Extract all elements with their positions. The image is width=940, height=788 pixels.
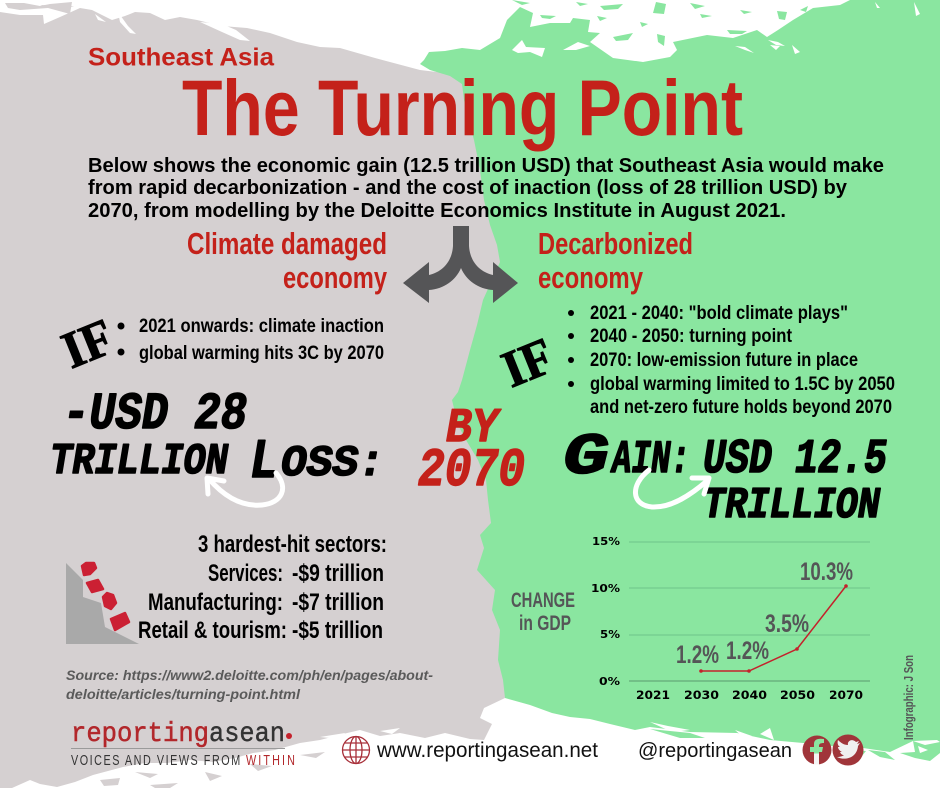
source note — [66, 668, 434, 702]
chart x axis labels — [636, 688, 863, 702]
chart label — [511, 588, 575, 635]
bullets: decarbonized scenario: and net-zero future holds beyond 2070 — [590, 396, 892, 418]
chart data labels — [676, 558, 853, 669]
logo: reportingasean: VOICES AND VIEWS FROM — [71, 751, 240, 768]
chart data labels: 3.5% — [765, 610, 809, 638]
chart data labels: 1.2% — [726, 637, 769, 665]
text block: hardest-hit sectors: Retail & tourism: — [138, 617, 287, 644]
handwritten: gain figure: USD 12.5 — [703, 433, 887, 487]
chart x axis labels: 2021 — [636, 688, 670, 702]
text block: hardest-hit sectors: 3 hardest-hit sectors: — [198, 531, 387, 558]
handwritten: gain figure — [563, 426, 887, 531]
intro text block: 2070, from modelling by the Deloitte Economics Institute in August 2021. — [88, 199, 786, 222]
bullets: decarbonized scenario: 2021 - 2040: "bold climate plays" — [590, 302, 848, 324]
intro text block — [88, 154, 884, 222]
chart y axis labels: 5% — [600, 628, 620, 641]
handwritten: By 2070: 2070 — [418, 441, 525, 502]
chart: change in GDP — [511, 535, 870, 702]
chart x axis labels: 2070 — [829, 688, 863, 702]
background: bottom edge wisps — [650, 722, 774, 740]
arrow: white curved, loss — [207, 473, 283, 505]
logo: reportingasean: WITHIN — [246, 751, 295, 768]
website: www.reportingasean.net — [376, 739, 598, 762]
chart x axis labels: 2030 — [684, 688, 719, 702]
bullets: decarbonized scenario: 2040 - 2050: turning point — [590, 325, 792, 347]
icon: falling rocks — [66, 563, 139, 644]
chart y axis labels — [591, 535, 620, 688]
background: bottom left mottling — [100, 752, 325, 788]
text block: hardest-hit sectors: -$7 trillion — [292, 589, 384, 616]
handwritten: IF left: IF — [54, 309, 122, 380]
intro text block: Below shows the economic gain (12.5 trillion USD) that Southeast Asia would make — [88, 154, 884, 177]
chart x axis labels: 2040 — [732, 688, 767, 702]
bullets: inaction scenario — [118, 315, 384, 364]
icon: facebook — [802, 736, 832, 764]
title: The Turning Point: The Turning Point — [182, 63, 743, 152]
handwritten: loss figure: -USD 28 — [63, 385, 247, 444]
chart y axis labels: 10% — [591, 582, 620, 595]
chart data labels: 1.2% — [676, 641, 719, 669]
chart label: in GDP — [519, 611, 571, 635]
logo: reportingasean — [71, 719, 295, 768]
text block: hardest-hit sectors: -$9 trillion — [292, 560, 384, 587]
subtitle: Southeast Asia: Southeast Asia — [88, 44, 275, 72]
handwritten: By 2070 — [418, 402, 525, 502]
chart y axis labels: 0% — [599, 675, 620, 688]
handwritten: By 2070: BY — [446, 402, 502, 456]
credit: Infographic J Son: Infographic: J Son — [902, 655, 916, 740]
handwritten: loss figure: TRILLION — [50, 437, 229, 487]
bullets: decarbonized scenario — [568, 302, 895, 418]
background: grey flecks on the top left — [5, 2, 74, 14]
chart gridlines — [629, 542, 870, 681]
background: grey torn panel — [0, 8, 505, 788]
handwritten: loss figure: L — [250, 430, 278, 494]
logo: reportingasean: reporting — [71, 719, 209, 750]
twitter handle: @reportingasean — [638, 740, 792, 762]
icon: globe — [342, 736, 370, 764]
handwritten: IF right: IF — [494, 328, 562, 399]
chart y axis labels: 15% — [592, 535, 620, 548]
text block: hardest-hit sectors: Services: — [208, 560, 283, 587]
heading: Decarbonized economy — [538, 226, 693, 295]
chart line series — [699, 584, 848, 673]
heading: Decarbonized economy: economy — [538, 260, 644, 295]
background: bottom right green mottling — [650, 729, 940, 761]
bullets: inaction scenario: 2021 onwards: climate inaction — [139, 315, 384, 337]
heading: Climate damaged economy — [187, 226, 388, 295]
text block: hardest-hit sectors — [138, 531, 387, 644]
chart label: CHANGE — [511, 588, 575, 612]
handwritten: gain figure: TRILLION — [703, 481, 880, 531]
bullets: decarbonized scenario: 2070: low-emission future in place — [590, 349, 858, 371]
heading: Climate damaged economy: Climate damaged — [187, 226, 387, 261]
logo: reportingasean: asean — [209, 719, 285, 750]
background: green flecks in the white top — [512, 0, 808, 46]
text block: hardest-hit sectors: -$5 trillion — [292, 617, 383, 644]
chart data labels: 10.3% — [800, 558, 853, 586]
intro text block: from rapid decarbonization - and the cost of inaction (loss of 28 trillion USD) by — [88, 176, 848, 199]
bullets: inaction scenario: global warming hits 3C by 2070 — [139, 342, 384, 364]
text block: hardest-hit sectors: Manufacturing: — [148, 589, 283, 616]
background: green torn panel — [420, 0, 940, 752]
handwritten: gain figure: G — [563, 426, 609, 491]
arrow: white curved, gain — [635, 470, 709, 507]
background: grey speckles near bottom — [320, 728, 400, 739]
handwritten: gain figure: AIN: — [610, 434, 690, 486]
bullets: decarbonized scenario: global warming limited to 1.5C by 2050 — [590, 373, 895, 395]
chart x axis labels: 2050 — [780, 688, 815, 702]
heading: Climate damaged economy: economy — [283, 260, 388, 295]
background: white wisps in the grey top — [95, 12, 250, 41]
icon: diverging arrow — [403, 226, 518, 303]
heading: Decarbonized economy: Decarbonized — [538, 226, 693, 261]
handwritten: loss figure: OSS: — [281, 439, 384, 489]
source note: Source: https://www2.deloitte.com/ph/en/pages/about- — [66, 668, 434, 683]
handwritten: loss figure — [50, 385, 384, 494]
source note: deloitte/articles/turning-point.html — [66, 687, 300, 702]
icon: twitter — [832, 734, 864, 766]
background: white wisps in the green top — [512, 2, 920, 57]
